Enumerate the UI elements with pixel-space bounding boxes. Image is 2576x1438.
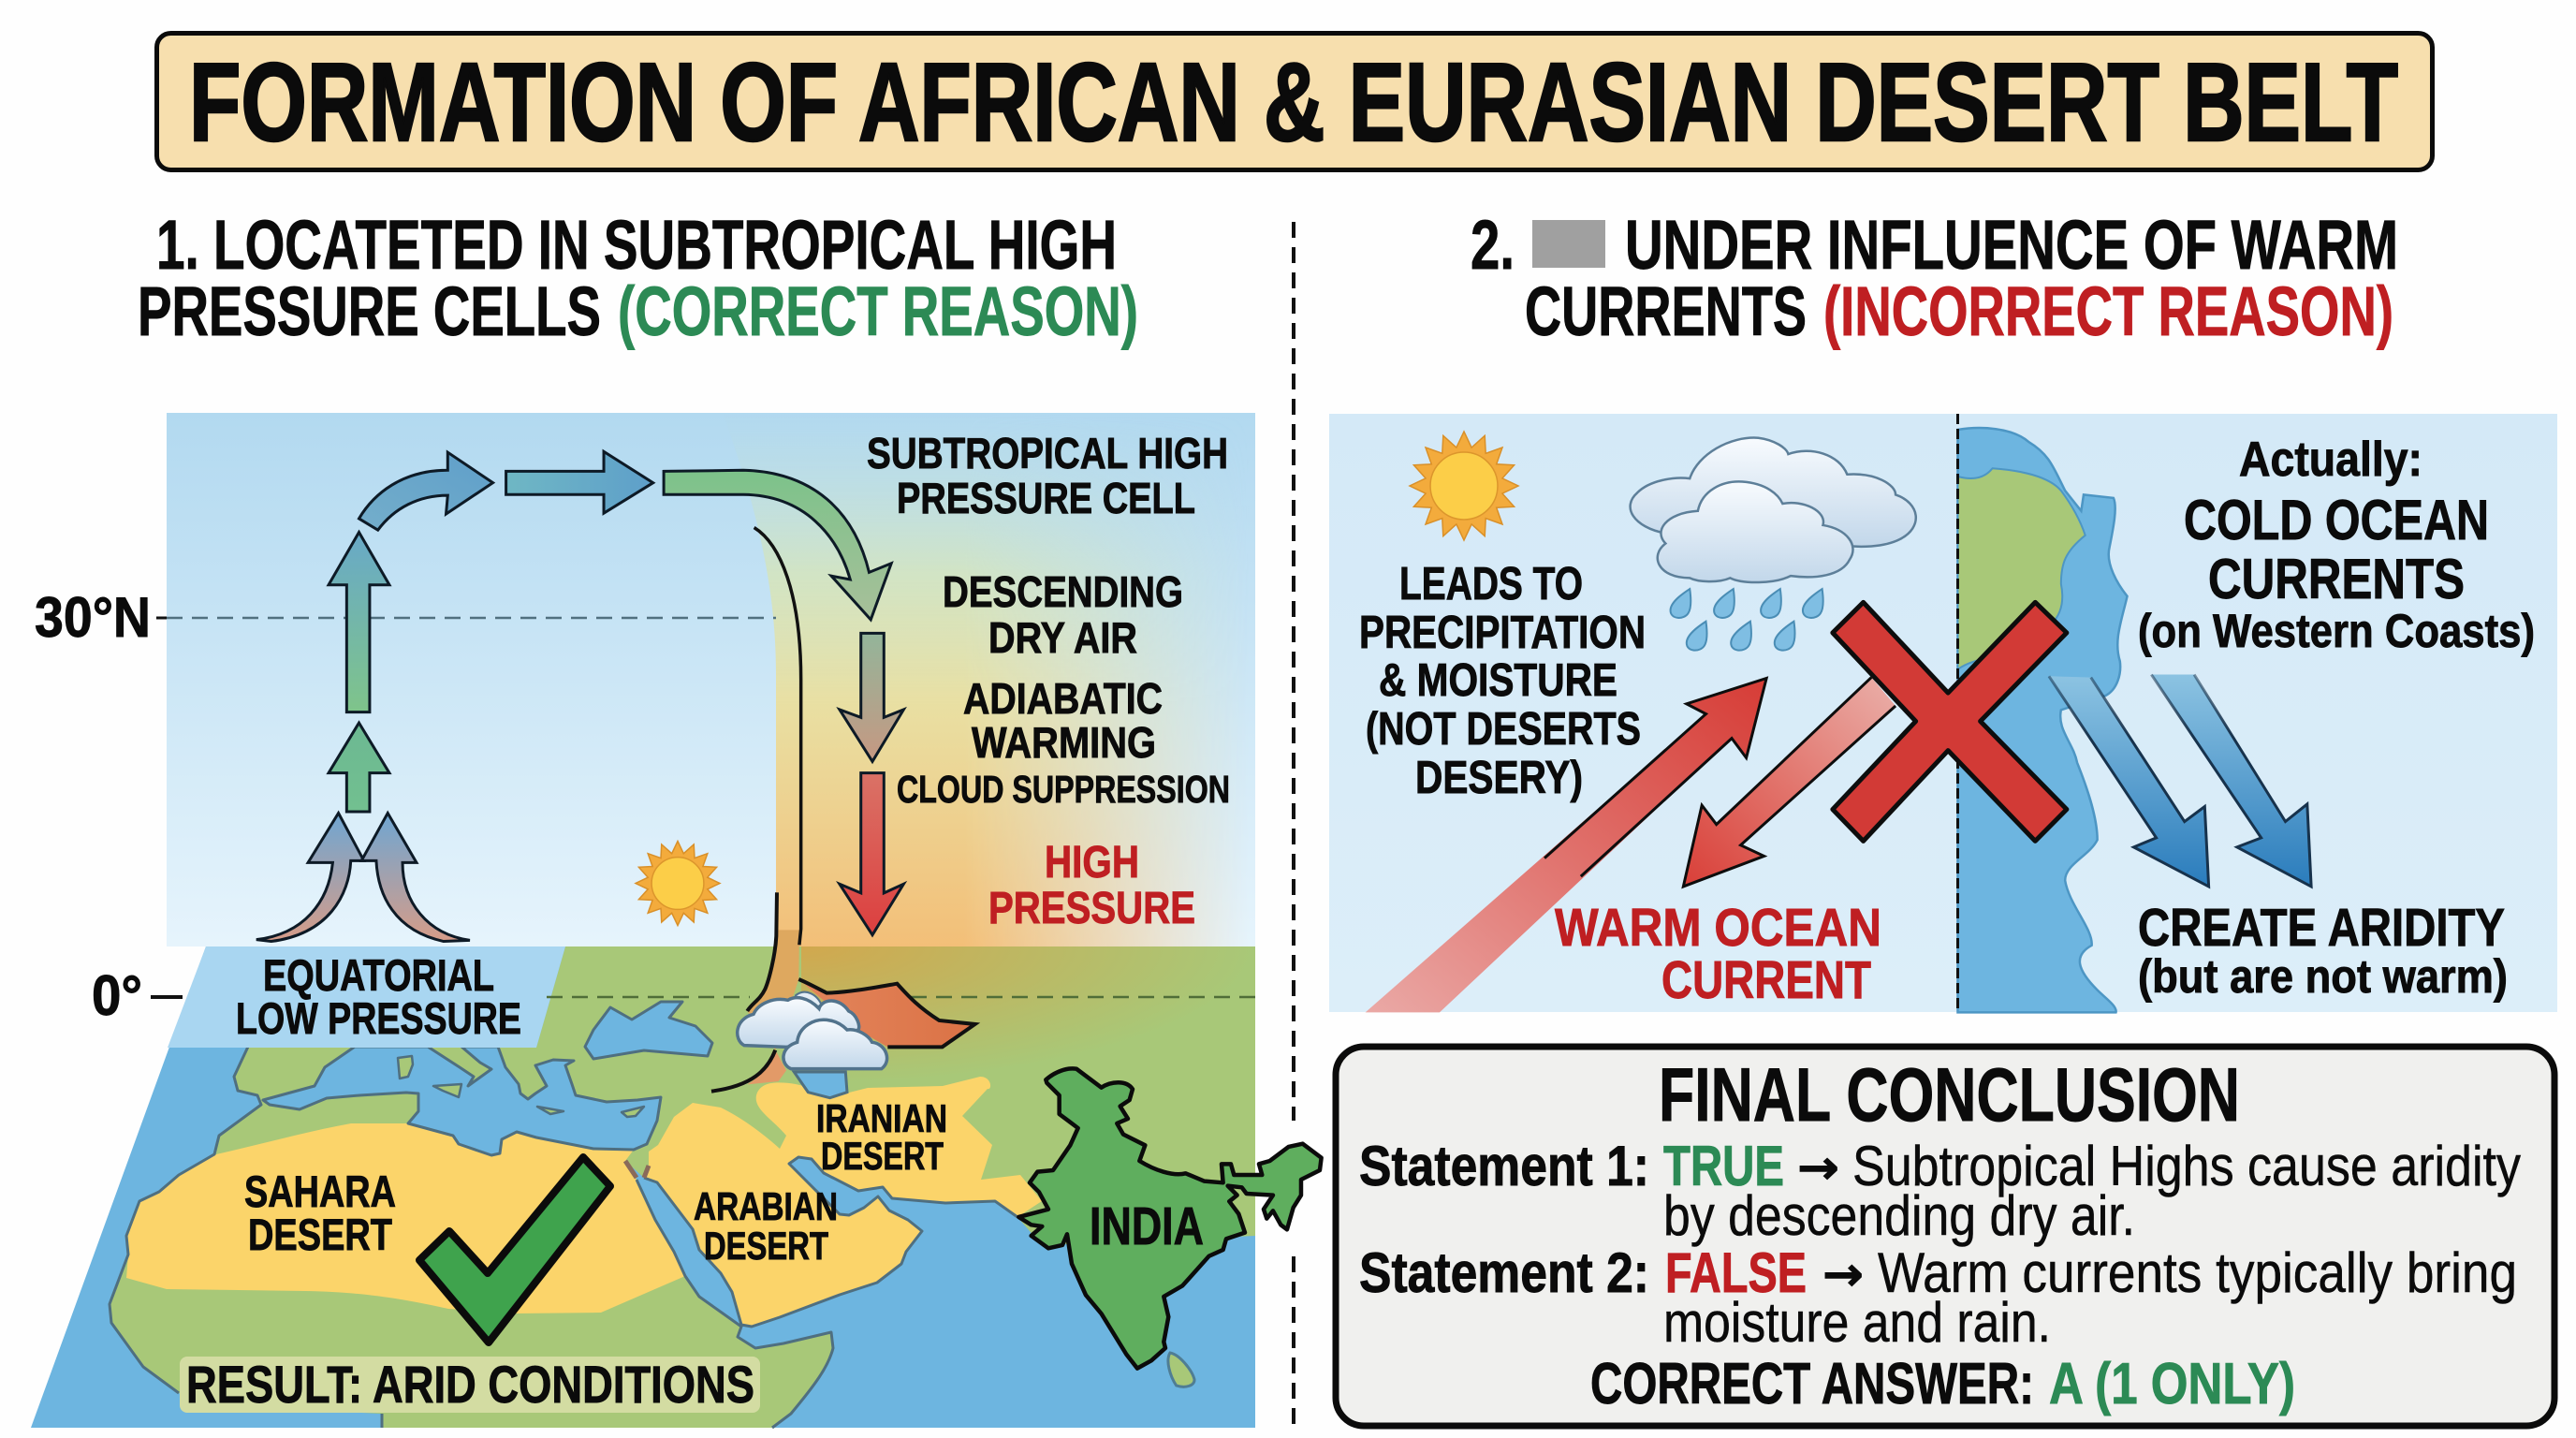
text: warm ocean current xyxy=(1555,898,1881,1010)
icon: sun xyxy=(1410,432,1518,540)
heading: statement 1 xyxy=(138,206,1138,350)
map label: Arabian: DESERT xyxy=(704,1224,828,1268)
conclusion heading: FINAL CONCLUSION xyxy=(1659,1053,2240,1137)
correct answer: A (1 ONLY) xyxy=(2049,1352,2295,1416)
map label: Sahara xyxy=(244,1167,396,1259)
coastline xyxy=(110,1047,1017,1428)
Sahara desert area xyxy=(126,1123,685,1313)
heading: statement 1: (CORRECT REASON) xyxy=(618,272,1138,350)
text: actually cold ocean currents: COLD OCEAN xyxy=(2184,489,2489,551)
sky background xyxy=(167,413,1255,946)
text: leads to precipitation: PRECIPITATION xyxy=(1359,608,1646,658)
heading: statement 2: CURRENTS xyxy=(1525,272,1807,350)
statement 1: TRUE xyxy=(1663,1135,1784,1197)
statement 1: Statement 1: xyxy=(1359,1135,1649,1197)
western coast with ocean and land xyxy=(1957,428,2128,1012)
labels: descending air column: CLOUD SUPPRESSION xyxy=(897,768,1230,811)
text: actually cold ocean currents xyxy=(2138,433,2535,657)
labels: descending air column: PRESSURE CELL xyxy=(897,474,1195,522)
cold current arrows xyxy=(2049,675,2311,887)
statement 2: FALSE xyxy=(1665,1241,1807,1304)
map label: Arabian xyxy=(694,1184,838,1268)
map label: Iranian xyxy=(816,1096,947,1178)
text: warm ocean current: WARM OCEAN xyxy=(1555,898,1881,958)
text: leads to precipitation: LEADS TO xyxy=(1399,559,1583,609)
equatorial low pressure band: LOW PRESSURE xyxy=(236,993,521,1043)
warm descending air plume xyxy=(739,457,1232,946)
panel: subtropical high pressure atmosphere and map xyxy=(31,413,1322,1428)
label: high pressure: PRESSURE xyxy=(988,884,1195,933)
rising and descending air arrows xyxy=(256,451,903,942)
equatorial low pressure band xyxy=(168,946,565,1048)
long descending plume curve xyxy=(754,528,801,945)
map xyxy=(31,946,1255,1428)
icon: check mark xyxy=(419,1157,610,1343)
text: leads to precipitation: DESERY) xyxy=(1415,753,1583,803)
heading: statement 1: 1. LOCATETED IN SUBTROPICAL HIGH xyxy=(156,206,1117,284)
heading: statement 2: 2. xyxy=(1471,206,1515,284)
correct answer: CORRECT ANSWER: xyxy=(1590,1352,2034,1416)
latitude label 30N: 30°N xyxy=(35,586,151,649)
statement 2 xyxy=(1359,1241,2517,1354)
label: high pressure xyxy=(988,838,1195,933)
labels: descending air column: DESCENDING xyxy=(943,567,1183,616)
heading: statement 1: PRESSURE CELLS xyxy=(138,272,601,350)
text: create aridity xyxy=(2138,898,2508,1003)
label: high pressure: HIGH xyxy=(1045,838,1139,888)
icon: rain cloud xyxy=(1631,438,1916,651)
Arabian and Iranian desert area xyxy=(644,1077,1042,1327)
labels: descending air column: DRY AIR xyxy=(988,613,1137,662)
map label: Sahara: SAHARA xyxy=(244,1167,396,1216)
map label: Iranian: DESERT xyxy=(821,1134,944,1178)
heading: statement 2: (INCORRECT REASON) xyxy=(1823,272,2393,350)
icon: sun xyxy=(636,841,720,925)
text: create aridity: CREATE ARIDITY xyxy=(2138,898,2505,958)
heading: statement 2 xyxy=(1471,206,2398,350)
labels: descending air column: WARMING xyxy=(972,718,1156,767)
map label: India: INDIA xyxy=(1090,1196,1204,1256)
plume outline and surface outflow xyxy=(711,892,975,1098)
map label: Iranian: IRANIAN xyxy=(816,1096,947,1140)
statement 1 xyxy=(1359,1135,2521,1247)
equatorial low pressure band: EQUATORIAL xyxy=(263,950,494,1000)
statement 2: Statement 2: xyxy=(1359,1241,1649,1304)
text: actually cold ocean currents: Actually: xyxy=(2239,433,2422,487)
panel: warm current vs cold current xyxy=(1329,414,2557,1012)
icon: red cross xyxy=(1833,602,2067,841)
panel: final conclusion xyxy=(1336,1047,2554,1426)
text: actually cold ocean currents: CURRENTS xyxy=(2208,548,2465,610)
Mediterranean sea xyxy=(263,1047,661,1155)
statement 2: → xyxy=(1822,1247,1864,1301)
latitude label 0 degrees: 0° xyxy=(92,964,142,1027)
labels: descending air column xyxy=(867,429,1230,811)
labels: descending air column: ADIABATIC xyxy=(963,674,1163,723)
text: warm ocean current: CURRENT xyxy=(1661,950,1871,1010)
text: leads to precipitation: & MOISTURE xyxy=(1379,655,1617,706)
result banner: RESULT: ARID CONDITIONS xyxy=(186,1355,754,1414)
statement 1: → xyxy=(1797,1140,1839,1195)
text: leads to precipitation: (NOT DESERTS xyxy=(1366,704,1641,755)
labels: descending air column: SUBTROPICAL HIGH xyxy=(867,429,1228,477)
Black Sea xyxy=(585,1002,712,1059)
warm current arrows xyxy=(1366,678,1895,1012)
statement 2: moisture and rain. xyxy=(1663,1291,2051,1354)
text: leads to precipitation xyxy=(1359,559,1646,803)
India map xyxy=(1018,1068,1322,1387)
map label: Sahara: DESERT xyxy=(248,1210,392,1259)
statement 1: by descending dry air. xyxy=(1663,1184,2135,1247)
map label: Arabian: ARABIAN xyxy=(694,1184,838,1228)
text: create aridity: (but are not warm) xyxy=(2138,950,2508,1003)
